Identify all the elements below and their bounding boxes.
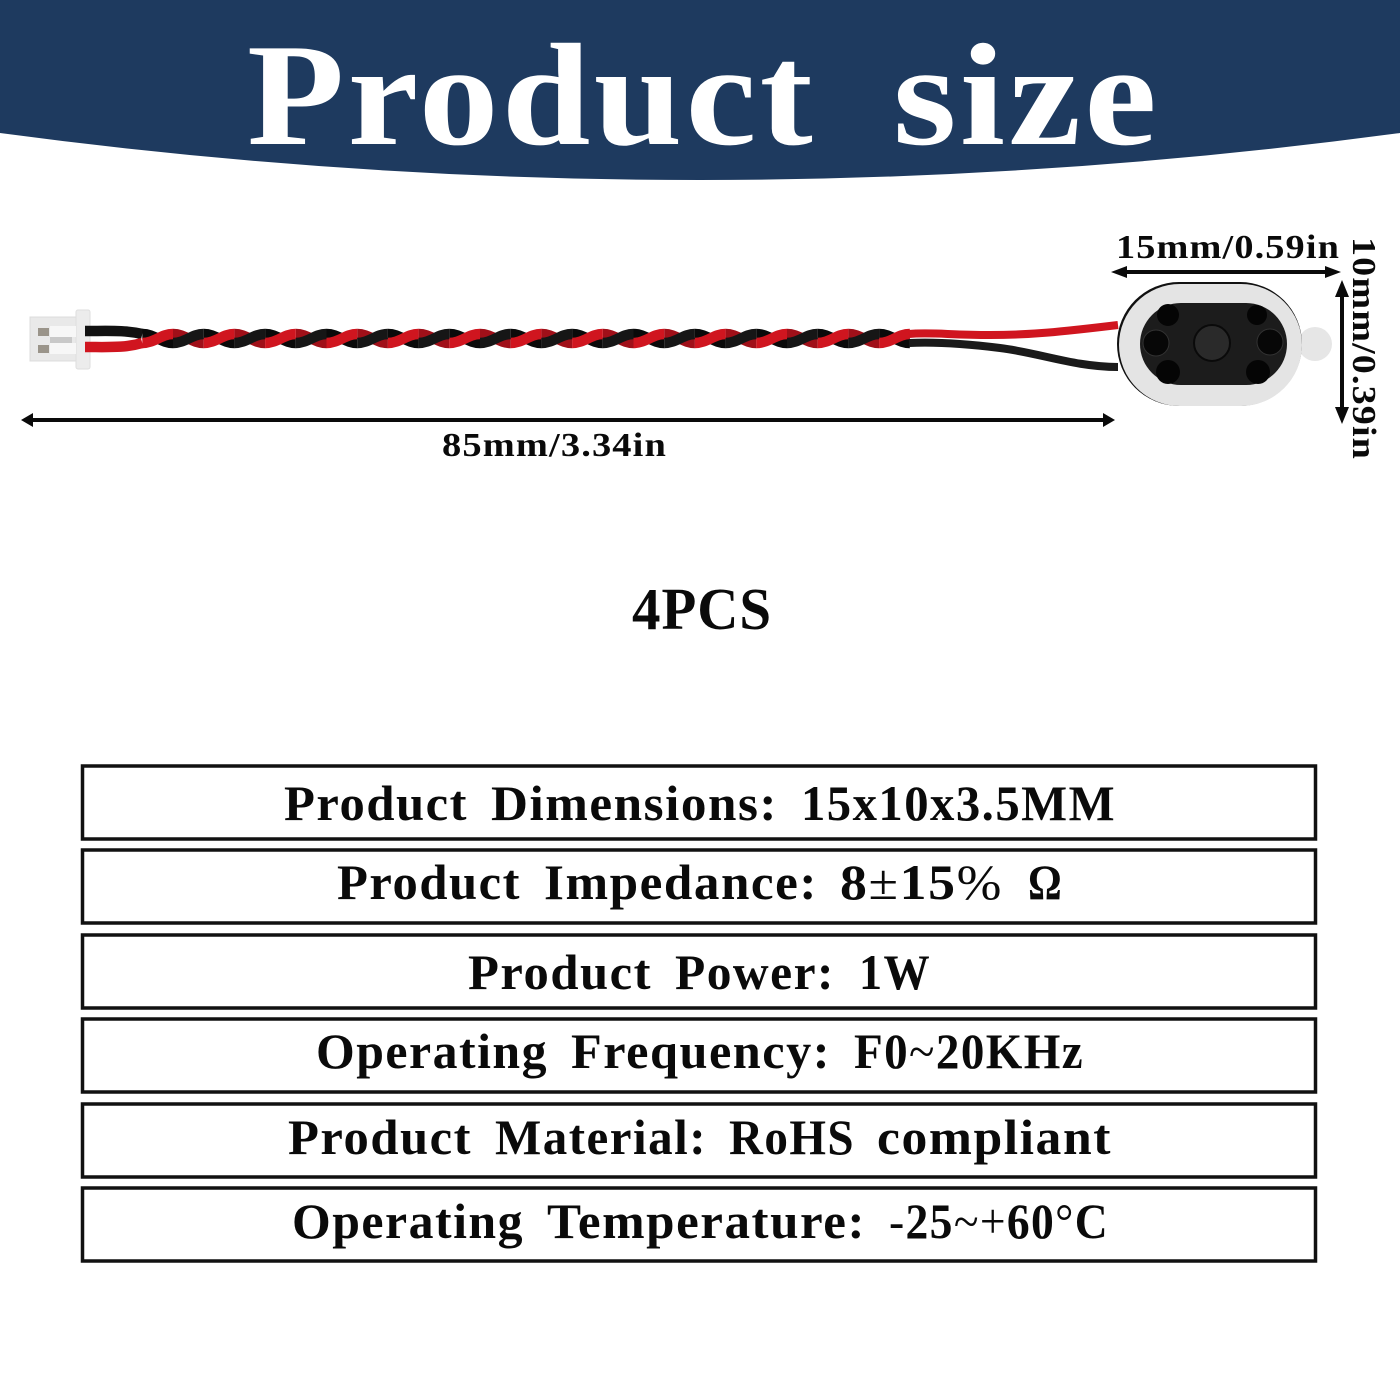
connector — [30, 310, 90, 369]
twisted wires — [85, 325, 1118, 367]
label: speaker height: 10mm/0.39in — [1345, 237, 1382, 460]
spec row: frequency: Operating — [316, 1023, 548, 1079]
title: size — [893, 14, 1160, 176]
spec row: power: 1W — [859, 944, 931, 1000]
spec row: impedance — [82, 850, 1316, 923]
spec row: material: Product — [288, 1109, 472, 1165]
spec row: dimensions — [82, 766, 1316, 839]
spec row: material — [82, 1104, 1316, 1177]
label: cable length: 85mm/3.34in — [442, 427, 667, 464]
spec row: frequency: Frequency: — [571, 1023, 831, 1079]
arrow: speaker width — [1111, 266, 1341, 278]
spec row: frequency: F0~20KHz — [854, 1023, 1093, 1079]
label: speaker width: 15mm/0.59in — [1116, 229, 1340, 266]
spec row: material: compliant — [877, 1109, 1112, 1165]
spec row: dimensions: Dimensions: — [491, 775, 778, 831]
spec row: impedance: Ω — [1028, 854, 1063, 910]
spec row: dimensions: Product — [284, 775, 468, 831]
spec row: impedance: Product — [337, 854, 521, 910]
spec row: temperature: -25~+60°C — [889, 1193, 1112, 1249]
spec row: impedance: Impedance: — [544, 854, 818, 910]
spec row: material: RoHS — [729, 1109, 855, 1165]
quantity label: 4PCS — [632, 576, 772, 642]
specification table — [82, 766, 1316, 1261]
spec row: impedance: 8±15% — [840, 854, 1000, 910]
spec row: material: Material: — [495, 1109, 707, 1165]
spec row: frequency — [82, 1019, 1316, 1092]
spec row: temperature: Operating — [292, 1193, 524, 1249]
spec row: temperature — [82, 1188, 1316, 1261]
spec row: temperature: Temperature: — [547, 1193, 866, 1249]
arrow: cable length — [21, 413, 1115, 427]
header banner — [0, 0, 1400, 180]
title: Product — [247, 14, 816, 176]
spec row: dimensions: 15x10x3.5MM — [801, 775, 1116, 831]
arrow: speaker height — [1335, 280, 1349, 424]
spec row: power — [82, 935, 1316, 1008]
product photo: speaker with twisted cable — [30, 282, 1332, 406]
spec row: power: Power: — [675, 944, 835, 1000]
speaker — [1117, 282, 1332, 406]
spec row: power: Product — [468, 944, 652, 1000]
